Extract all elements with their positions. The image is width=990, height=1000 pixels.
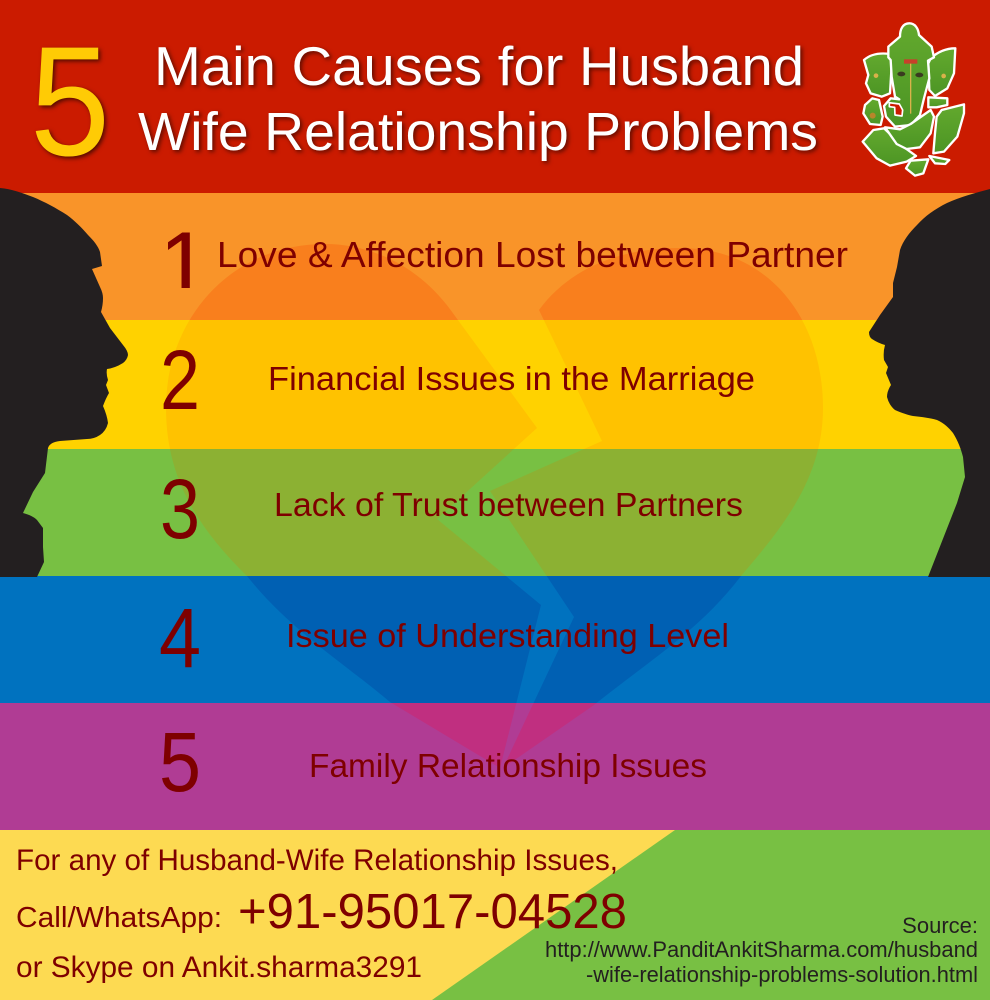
- contact text: or Skype on Ankit.sharma3291: [16, 951, 422, 984]
- big yellow 5: 5: [30, 15, 110, 189]
- band 5: purple: [0, 703, 990, 830]
- leaf hand: [933, 104, 964, 153]
- contact text: Call/WhatsApp:: [16, 902, 222, 934]
- header band: [0, 0, 990, 193]
- footer green triangle: [432, 830, 990, 1000]
- item 4: 4: [159, 591, 201, 685]
- source text: Source:: [902, 913, 978, 938]
- band 3: green: [0, 449, 990, 576]
- source text: -wife-relationship-problems-solution.html: [586, 962, 978, 987]
- item 3: [160, 462, 743, 556]
- item 1: [168, 232, 848, 288]
- item 3: 3: [160, 462, 200, 556]
- left silhouette: [0, 188, 128, 577]
- title: Main Causes for Husband: [154, 35, 804, 97]
- footer yellow panel: [0, 830, 990, 1000]
- item 1: 1: [158, 212, 210, 317]
- icon: Ganesha: [863, 23, 964, 176]
- broken heart overlay: [166, 244, 823, 768]
- left hand: [863, 98, 883, 125]
- head and trunk: [884, 23, 934, 127]
- right foot: [929, 156, 949, 164]
- item 1: Love & Affection Lost between Partner: [217, 234, 848, 275]
- title: [138, 35, 818, 162]
- face details: [870, 59, 946, 119]
- contact text: [16, 844, 627, 984]
- source text: [545, 913, 978, 987]
- belly: [885, 110, 934, 149]
- item 5: 5: [159, 715, 201, 809]
- right silhouette: [869, 189, 990, 577]
- right ear: [928, 48, 955, 96]
- item 2: [160, 333, 755, 427]
- feet: [906, 159, 928, 176]
- item 2: 2: [160, 333, 200, 427]
- item 4: Issue of Understanding Level: [286, 617, 729, 654]
- item 3: Lack of Trust between Partners: [274, 486, 743, 523]
- item 2: Financial Issues in the Marriage: [268, 360, 755, 397]
- item 5: [159, 715, 707, 809]
- band 1: orange: [0, 193, 990, 320]
- item 5: Family Relationship Issues: [309, 747, 707, 784]
- contact text: +91-95017-04528: [238, 885, 627, 939]
- band 2: yellow: [0, 320, 990, 449]
- right upper hand: [928, 97, 947, 107]
- left leg: [863, 128, 916, 166]
- title: Wife Relationship Problems: [138, 102, 818, 162]
- item 4: [159, 591, 729, 685]
- left ear: [864, 53, 892, 97]
- trunk opening: [889, 103, 903, 116]
- contact text: For any of Husband-Wife Relationship Issues,: [16, 844, 618, 877]
- source text: http://www.PanditAnkitSharma.com/husband: [545, 937, 978, 962]
- band 4: blue: [0, 576, 990, 703]
